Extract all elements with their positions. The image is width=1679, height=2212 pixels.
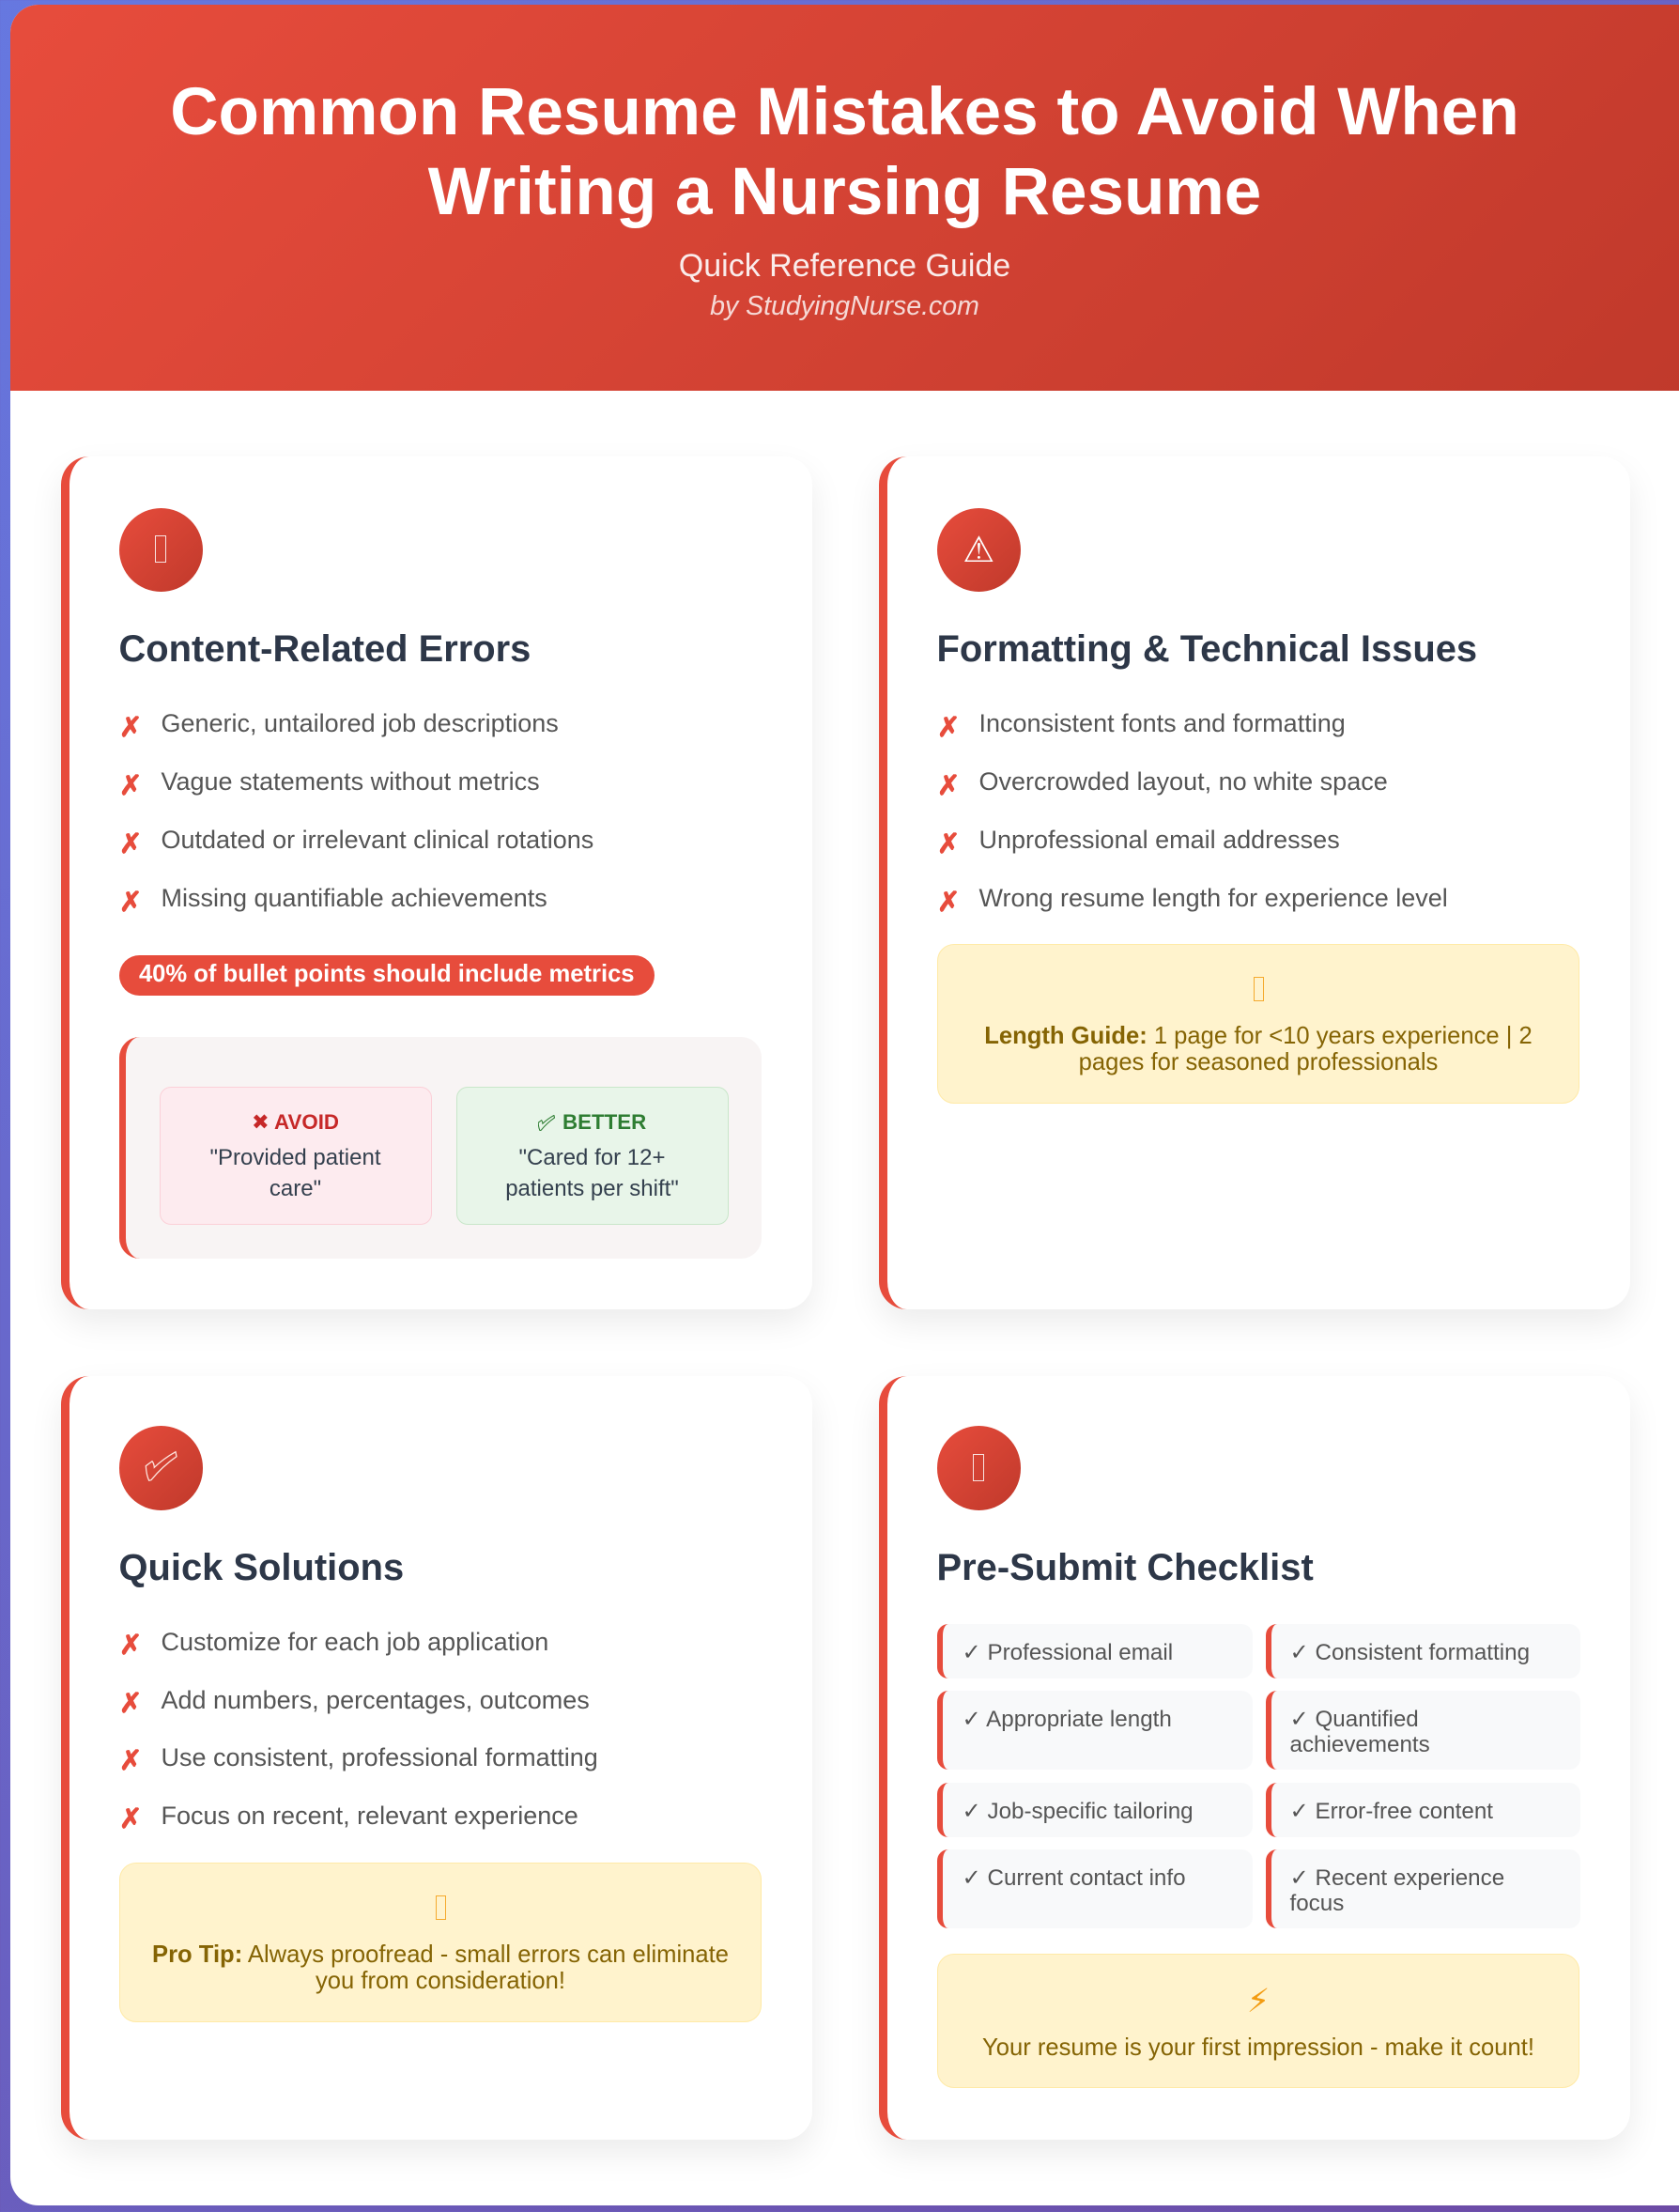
heading: Content-Related Errors (118, 628, 531, 670)
panel: quick solutions (60, 1376, 811, 2140)
avoid example (160, 1087, 432, 1225)
better example: "Cared for 12+ patients per shift" (505, 1145, 679, 1200)
list item: Vague statements without metrics (162, 767, 540, 796)
checklist item (1266, 1624, 1579, 1678)
checklist item: ✓ Professional email (962, 1640, 1173, 1665)
icon: missing glyph (436, 1895, 446, 1920)
heading: Pre-Submit Checklist (937, 1546, 1314, 1587)
checklist item: ✓ Appropriate length (962, 1707, 1172, 1732)
checklist item (937, 1691, 1253, 1770)
title line two: Writing a Nursing Resume (428, 154, 1261, 229)
panel: pre-submit checklist (879, 1376, 1630, 2140)
checklist item (1266, 1783, 1579, 1837)
heading: Quick Solutions (118, 1546, 404, 1587)
list item: ✗ (937, 768, 960, 800)
callout: pro tip (119, 1863, 762, 2022)
checklist item (1266, 1849, 1579, 1928)
list item: ✗ (119, 1687, 142, 1719)
list item: ✗ (119, 1744, 142, 1776)
title line one: Common Resume Mistakes to Avoid When (170, 75, 1519, 148)
list item: ✗ (119, 768, 142, 800)
callout text: Your resume is your first impression - make it count! (982, 2034, 1534, 2061)
list item: Inconsistent fonts and formatting (978, 709, 1346, 737)
checklist item: ✓ Quantified achievements (1290, 1707, 1430, 1757)
list item: ✗ (119, 885, 142, 917)
metric badge (118, 955, 655, 996)
list item: ✗ (937, 827, 960, 859)
better example (456, 1087, 729, 1225)
icon: check mark (118, 1426, 203, 1510)
panel: formatting and technical issues (879, 456, 1630, 1309)
icon: missing glyph (1254, 977, 1264, 1001)
checklist item (937, 1624, 1253, 1678)
better example: BETTER (562, 1110, 646, 1134)
list item: Unprofessional email addresses (978, 826, 1340, 854)
list item: Overcrowded layout, no white space (978, 767, 1388, 796)
avoid example: "Provided patient care" (210, 1145, 380, 1200)
checklist item: ✓ Job-specific tailoring (962, 1799, 1194, 1824)
callout text: Length Guide: 1 page for <10 years experience | 2 pages for seasoned professionals (984, 1022, 1533, 1075)
list item: ✗ (937, 710, 960, 742)
list item: ✗ (937, 885, 960, 917)
checklist item: ✓ Error-free content (1290, 1799, 1493, 1824)
icon: lightning bolt: ⚡ (1247, 1983, 1270, 2020)
icon: warning: ⚠ (963, 528, 994, 569)
callout text: Pro Tip: Always proofread - small errors can eliminate you from consideration! (152, 1941, 729, 1994)
checklist item: ✓ Recent experience focus (1290, 1865, 1504, 1916)
checklist item (937, 1783, 1253, 1837)
panel: content-related errors (60, 456, 811, 1309)
checklist item: ✓ Consistent formatting (1290, 1640, 1530, 1665)
icon: missing glyph (118, 507, 203, 592)
icon: missing glyph (937, 1426, 1021, 1510)
list item: Missing quantifiable achievements (162, 884, 547, 912)
checklist item: ✓ Current contact info (962, 1865, 1186, 1891)
list item: Focus on recent, relevant experience (162, 1802, 578, 1830)
list item: Generic, untailored job descriptions (162, 709, 559, 737)
list item: Wrong resume length for experience level (978, 884, 1448, 912)
example comparison box (118, 1037, 762, 1259)
byline: by StudyingNurse.com (710, 291, 979, 321)
list item: ✗ (119, 710, 142, 742)
header banner (10, 5, 1679, 391)
list item: ✗ (119, 1629, 142, 1661)
metric badge: 40% of bullet points should include metrics (139, 961, 635, 987)
heading: Formatting & Technical Issues (937, 628, 1477, 670)
list item: ✗ (119, 827, 142, 859)
list item: Use consistent, professional formatting (162, 1743, 598, 1771)
list item: ✗ (119, 1802, 142, 1834)
checklist item (1266, 1691, 1579, 1770)
callout: first impression (937, 1954, 1579, 2088)
list item: Outdated or irrelevant clinical rotations (162, 826, 593, 854)
avoid example: ✖ AVOID (252, 1110, 339, 1134)
list item: Add numbers, percentages, outcomes (162, 1685, 590, 1713)
icon: warning (937, 507, 1021, 592)
callout: length guide (937, 944, 1579, 1104)
list item: Customize for each job application (162, 1627, 548, 1655)
subtitle: Quick Reference Guide (679, 248, 1010, 284)
checklist item (937, 1849, 1253, 1928)
